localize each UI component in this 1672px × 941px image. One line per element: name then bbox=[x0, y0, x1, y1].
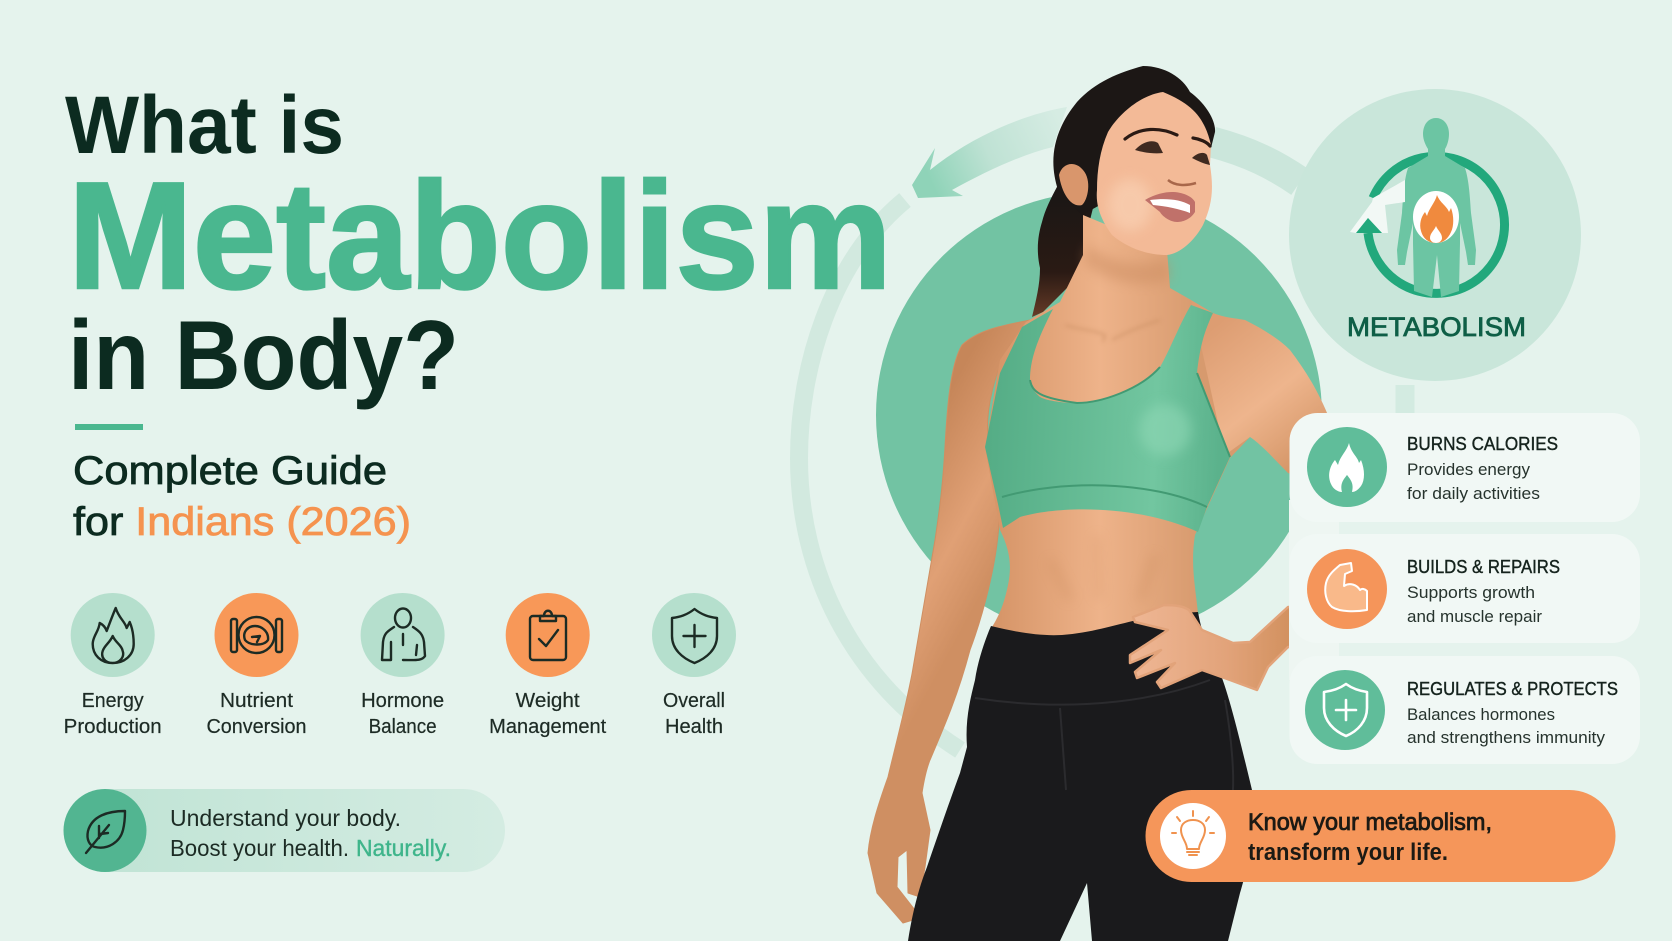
subtitle: for Indians (2026) bbox=[73, 500, 411, 544]
label bbox=[64, 690, 162, 738]
label: Management bbox=[489, 716, 607, 738]
green backdrop circle bbox=[876, 192, 1322, 638]
label: Balance bbox=[369, 716, 437, 738]
title: Metabolism bbox=[68, 151, 892, 321]
icon: person bbox=[382, 608, 425, 660]
text: burns calories: for daily activities bbox=[1407, 484, 1540, 503]
background cycle ring bbox=[799, 142, 1405, 750]
hand and forearm on hip bbox=[1130, 605, 1295, 690]
face highlight bbox=[1108, 179, 1152, 231]
text: regulates and protects: and strengthens immunity bbox=[1407, 728, 1606, 747]
item: overall health bbox=[652, 593, 736, 738]
title: What is bbox=[65, 80, 344, 171]
item: energy production bbox=[64, 593, 162, 738]
callout text bbox=[1248, 809, 1492, 866]
text: burns calories: Provides energy bbox=[1407, 460, 1531, 479]
callout text: Know your metabolism, bbox=[1248, 809, 1492, 836]
panel: regulates and protects bbox=[1290, 656, 1640, 764]
text: builds and repairs: Supports growth bbox=[1407, 583, 1535, 602]
icon: shield plus bbox=[672, 609, 717, 663]
text: burns calories bbox=[1407, 434, 1558, 503]
face bbox=[1097, 92, 1212, 255]
nose shadow bbox=[1168, 180, 1196, 185]
badge body silhouette bbox=[1397, 118, 1476, 297]
label: Energy bbox=[82, 690, 144, 712]
text: regulates and protects bbox=[1407, 679, 1618, 747]
label: Hormone bbox=[361, 690, 444, 712]
neck shading bbox=[1084, 245, 1170, 284]
item: weight management bbox=[489, 593, 607, 738]
card column backing bbox=[1289, 500, 1339, 680]
ear bbox=[1059, 164, 1088, 205]
ponytail bbox=[1032, 185, 1095, 317]
right upper arm bbox=[1191, 300, 1330, 490]
text: builds and repairs bbox=[1407, 557, 1560, 626]
hair bbox=[1053, 66, 1215, 215]
icon: flame outline bbox=[93, 608, 134, 663]
icon: shield plus bbox=[1324, 684, 1367, 736]
tagline text: Understand your body. bbox=[170, 805, 401, 831]
subtitle: Complete Guide bbox=[73, 449, 387, 493]
collarbone bbox=[1065, 320, 1160, 342]
callout: know your metabolism bbox=[1146, 790, 1616, 882]
text: regulates and protects: Balances hormones bbox=[1407, 705, 1555, 724]
text: regulates and protects: REGULATES & PROTECTS bbox=[1407, 679, 1618, 699]
text: burns calories: BURNS CALORIES bbox=[1407, 434, 1558, 454]
icon: white flame bbox=[1329, 443, 1364, 492]
bra highlight bbox=[1139, 404, 1191, 456]
panel: burns calories bbox=[1290, 413, 1640, 522]
subtitle bbox=[73, 449, 411, 544]
label bbox=[361, 690, 444, 738]
panel: builds and repairs bbox=[1290, 534, 1640, 643]
torso and chest bbox=[985, 215, 1250, 660]
metabolism badge bbox=[1289, 89, 1581, 381]
icon: flexed arm bbox=[1325, 563, 1367, 611]
eyes bbox=[1135, 141, 1210, 165]
torso shading bbox=[1050, 535, 1155, 600]
badge cycle ring bbox=[1368, 156, 1505, 293]
eyebrows bbox=[1125, 129, 1210, 146]
label: Health bbox=[665, 716, 723, 738]
tagline text: Naturally. bbox=[356, 835, 451, 861]
item: hormone balance bbox=[361, 593, 445, 738]
tagline text: Boost your health. bbox=[170, 835, 349, 861]
label: Nutrient bbox=[220, 690, 293, 712]
bra band seam bbox=[1002, 367, 1230, 507]
label bbox=[663, 690, 725, 738]
teeth bbox=[1150, 199, 1190, 213]
tagline pill bbox=[64, 789, 505, 872]
title: in Body? bbox=[68, 300, 459, 410]
badge label: METABOLISM bbox=[1347, 312, 1526, 342]
badge white arrow swoosh bbox=[1350, 180, 1405, 233]
leggings seams bbox=[975, 680, 1233, 800]
woman figure bbox=[868, 66, 1330, 941]
sports bra bbox=[985, 305, 1230, 532]
title bbox=[65, 80, 892, 410]
icon: clipboard bbox=[530, 611, 566, 660]
mouth bbox=[1145, 192, 1195, 222]
title divider bbox=[75, 424, 143, 430]
left arm bbox=[868, 320, 1030, 923]
label bbox=[489, 690, 607, 738]
label: Overall bbox=[663, 690, 725, 712]
label: Production bbox=[64, 716, 162, 738]
label: Conversion bbox=[206, 716, 306, 738]
badge arrow head bbox=[1356, 218, 1382, 233]
icon: light bulb bbox=[1172, 811, 1214, 855]
icon: leaf bbox=[86, 811, 125, 853]
tagline text bbox=[170, 805, 451, 861]
icon: plate and food bbox=[231, 617, 282, 653]
label bbox=[206, 690, 306, 738]
text: builds and repairs: BUILDS & REPAIRS bbox=[1407, 557, 1560, 577]
item: nutrient conversion bbox=[206, 593, 306, 738]
label: Weight bbox=[516, 690, 580, 712]
text: builds and repairs: and muscle repair bbox=[1407, 607, 1542, 626]
badge flame bbox=[1413, 191, 1459, 243]
callout text: transform your life. bbox=[1248, 839, 1448, 866]
leggings bbox=[908, 612, 1254, 941]
cycle arrow bbox=[912, 107, 1067, 198]
